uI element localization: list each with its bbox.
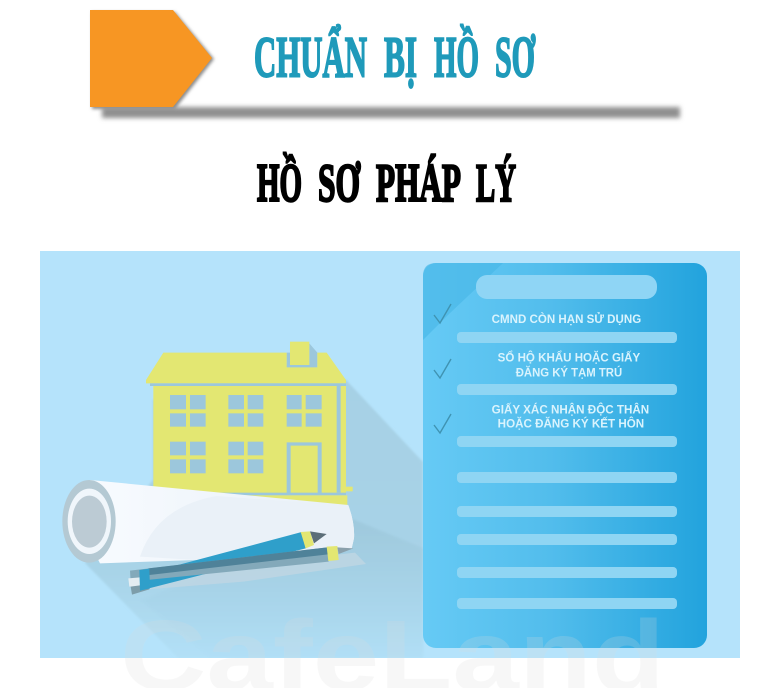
subtitle	[257, 152, 516, 213]
item 3 text: GIẤY XÁC NHẬN ĐỘC THÂN	[492, 403, 649, 416]
roll end	[62, 480, 116, 563]
item 3 text: HOẶC ĐĂNG KÝ KẾT HÔN	[498, 417, 644, 430]
board header pill	[476, 275, 657, 299]
pencil shadow	[128, 553, 366, 590]
blue pencil	[137, 531, 327, 591]
panel: illustration background	[40, 251, 740, 658]
roll sheet shade	[140, 496, 354, 560]
item 3 text	[492, 403, 649, 430]
illustration: paper roll	[62, 480, 354, 563]
house roof	[146, 353, 346, 383]
house body	[153, 386, 346, 494]
house door	[287, 442, 322, 493]
check mark 2	[434, 359, 451, 378]
title: HỒ	[434, 24, 479, 90]
dark pencil	[128, 546, 353, 595]
illustration: house	[146, 342, 353, 506]
check mark 1	[434, 304, 451, 323]
subtitle: LÝ	[476, 153, 516, 213]
orange arrow tab	[90, 10, 212, 107]
house chimney	[287, 342, 317, 367]
checklist lines	[457, 332, 677, 609]
house windows	[170, 395, 322, 473]
subtitle: SƠ	[318, 153, 361, 213]
panel: checklist board	[423, 263, 707, 648]
house drainpipe and base	[153, 386, 353, 506]
orange arrow tab shadow	[92, 12, 214, 109]
item 2 text	[498, 352, 641, 380]
subtitle: HỒ	[257, 152, 302, 213]
board background	[423, 263, 707, 648]
roll sheet	[87, 480, 354, 563]
long shadows of house and roll	[86, 380, 423, 643]
item 1 text: CMND CÒN HẠN SỬ DỤNG	[492, 313, 641, 326]
title: CHUẨN	[254, 24, 367, 90]
subtitle: PHÁP	[376, 153, 461, 213]
check mark 3	[434, 414, 451, 433]
roof underside line	[150, 383, 346, 386]
item 2 text: ĐĂNG KÝ TẠM TRÚ	[516, 367, 622, 380]
board corner shade	[423, 263, 503, 340]
title: BỊ	[384, 24, 417, 90]
item 2 text: SỔ HỘ KHẨU HOẶC GIẤY	[498, 352, 641, 365]
illustration: pencils	[128, 531, 366, 595]
title: SƠ	[495, 24, 536, 90]
banner shadow bar	[102, 107, 680, 118]
header banner	[90, 10, 680, 118]
